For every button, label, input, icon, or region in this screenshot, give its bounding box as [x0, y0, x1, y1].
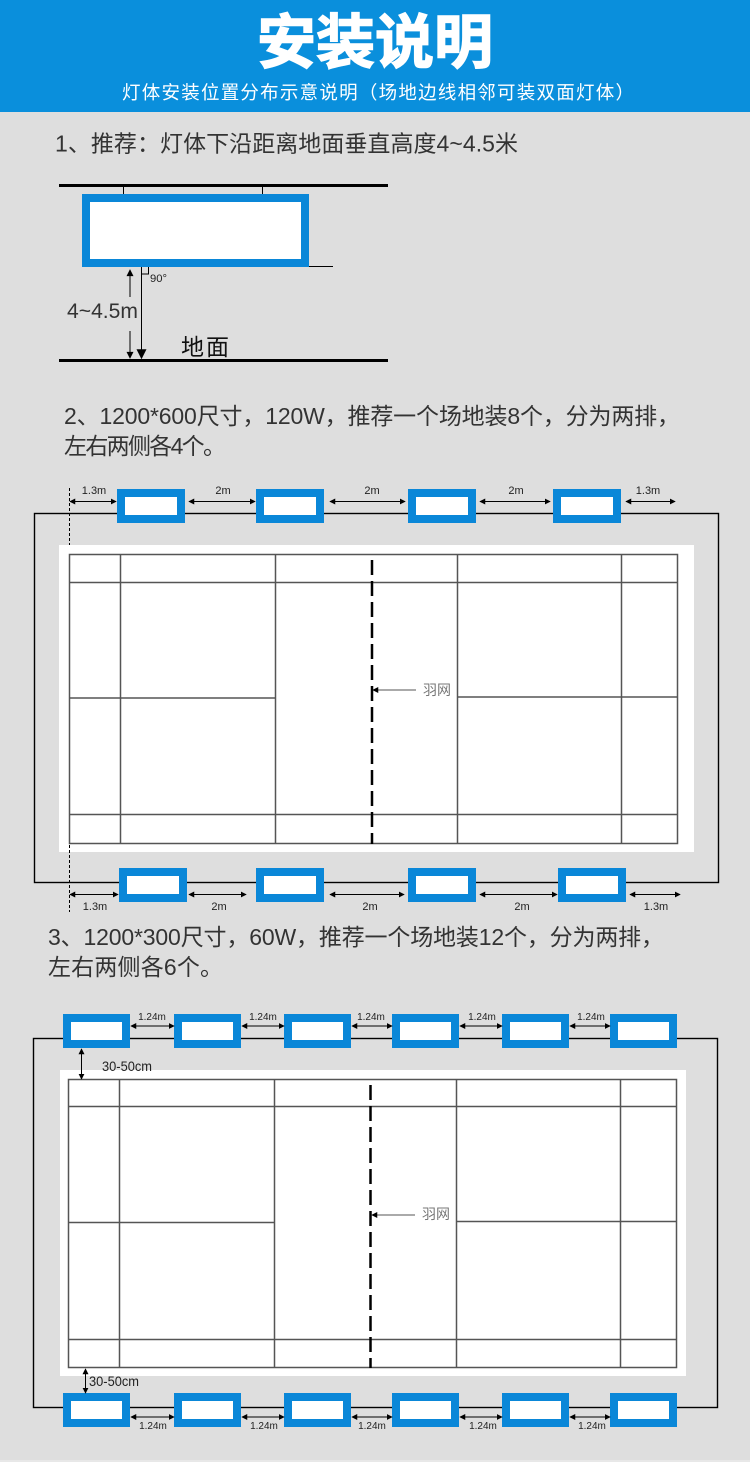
diagram: 12 lamp layout [34, 1012, 718, 1432]
subtitle: 灯体安装位置分布示意说明（场地边线相邻可装双面灯体） [122, 82, 634, 103]
bottom dimensions: 1.24m [578, 1421, 606, 1432]
wiring loop [34, 1038, 718, 1408]
top dimensions: 2m [215, 485, 231, 497]
top gap dimension: 30-50cm [102, 1059, 152, 1074]
bottom dimensions: 2m [362, 901, 378, 913]
bottom lamps [123, 872, 622, 898]
top dimensions: 1.3m [636, 485, 660, 497]
ceiling line [59, 184, 388, 187]
ground line [59, 359, 388, 362]
step 3 text [48, 924, 664, 980]
top dimensions: 1.24m [468, 1012, 496, 1023]
top dimensions: 1.24m [249, 1012, 277, 1023]
bottom dimensions: 2m [514, 901, 530, 913]
bottom gap dimension [86, 1369, 139, 1393]
diagram: 8 lamp layout [34, 485, 718, 913]
lamp side panel [86, 198, 305, 263]
perpendicular line and 90 degree mark [142, 267, 167, 358]
top lamps [121, 493, 617, 519]
court panel [60, 1070, 686, 1376]
wiring loop [34, 514, 718, 882]
bottom gap dimension: 30-50cm [89, 1374, 139, 1389]
bottom dimensions: 1.24m [139, 1421, 167, 1432]
title: 安装说明 [257, 10, 493, 76]
court panel [59, 545, 694, 852]
top dimensions: 2m [364, 485, 380, 497]
bottom dimensions: 1.24m [469, 1421, 497, 1432]
net [369, 1085, 372, 1368]
bottom dimensions: 1.3m [644, 901, 668, 913]
step 2 text: 左右两侧各4个。 [64, 433, 226, 459]
top dimensions: 2m [508, 485, 524, 497]
top dimensions [70, 485, 675, 502]
step 2 text: 2、1200*600尺寸，120W，推荐一个场地装8个，分为两排， [64, 403, 680, 429]
top dimensions: 1.24m [357, 1012, 385, 1023]
top gap dimension [82, 1049, 152, 1079]
step 2 text [64, 403, 680, 459]
bottom dimensions [70, 894, 680, 913]
step 3 text: 3、1200*300尺寸，60W，推荐一个场地装12个，分为两排， [48, 924, 664, 950]
bottom dimensions: 1.3m [83, 901, 107, 913]
perpendicular line and 90 degree mark: 90° [150, 273, 167, 285]
bottom lamps [67, 1397, 673, 1423]
net label [373, 682, 451, 698]
ground label: 地面 [181, 334, 229, 360]
bottom dimensions: 1.24m [358, 1421, 386, 1432]
top dimensions [131, 1012, 610, 1026]
bottom dimensions: 2m [211, 901, 227, 913]
top lamps [67, 1018, 673, 1044]
height arrows [129, 270, 131, 358]
top dimensions: 1.3m [82, 485, 106, 497]
top dimensions: 1.24m [577, 1012, 605, 1023]
step 1 heading: 1、推荐：灯体下沿距离地面垂直高度4~4.5米 [55, 130, 518, 156]
diagram: mounting height [59, 184, 388, 362]
net label [372, 1206, 450, 1222]
bottom dimensions [131, 1417, 610, 1432]
boundary dotted lines [68, 488, 70, 912]
top dimensions: 1.24m [138, 1012, 166, 1023]
net label: 羽网 [423, 682, 451, 698]
header banner [0, 0, 750, 112]
step 3 text: 左右两侧各6个。 [48, 954, 223, 980]
net [371, 560, 373, 844]
net label: 羽网 [422, 1206, 450, 1222]
bottom dimensions: 1.24m [250, 1421, 278, 1432]
height label: 4~4.5m [67, 300, 138, 323]
